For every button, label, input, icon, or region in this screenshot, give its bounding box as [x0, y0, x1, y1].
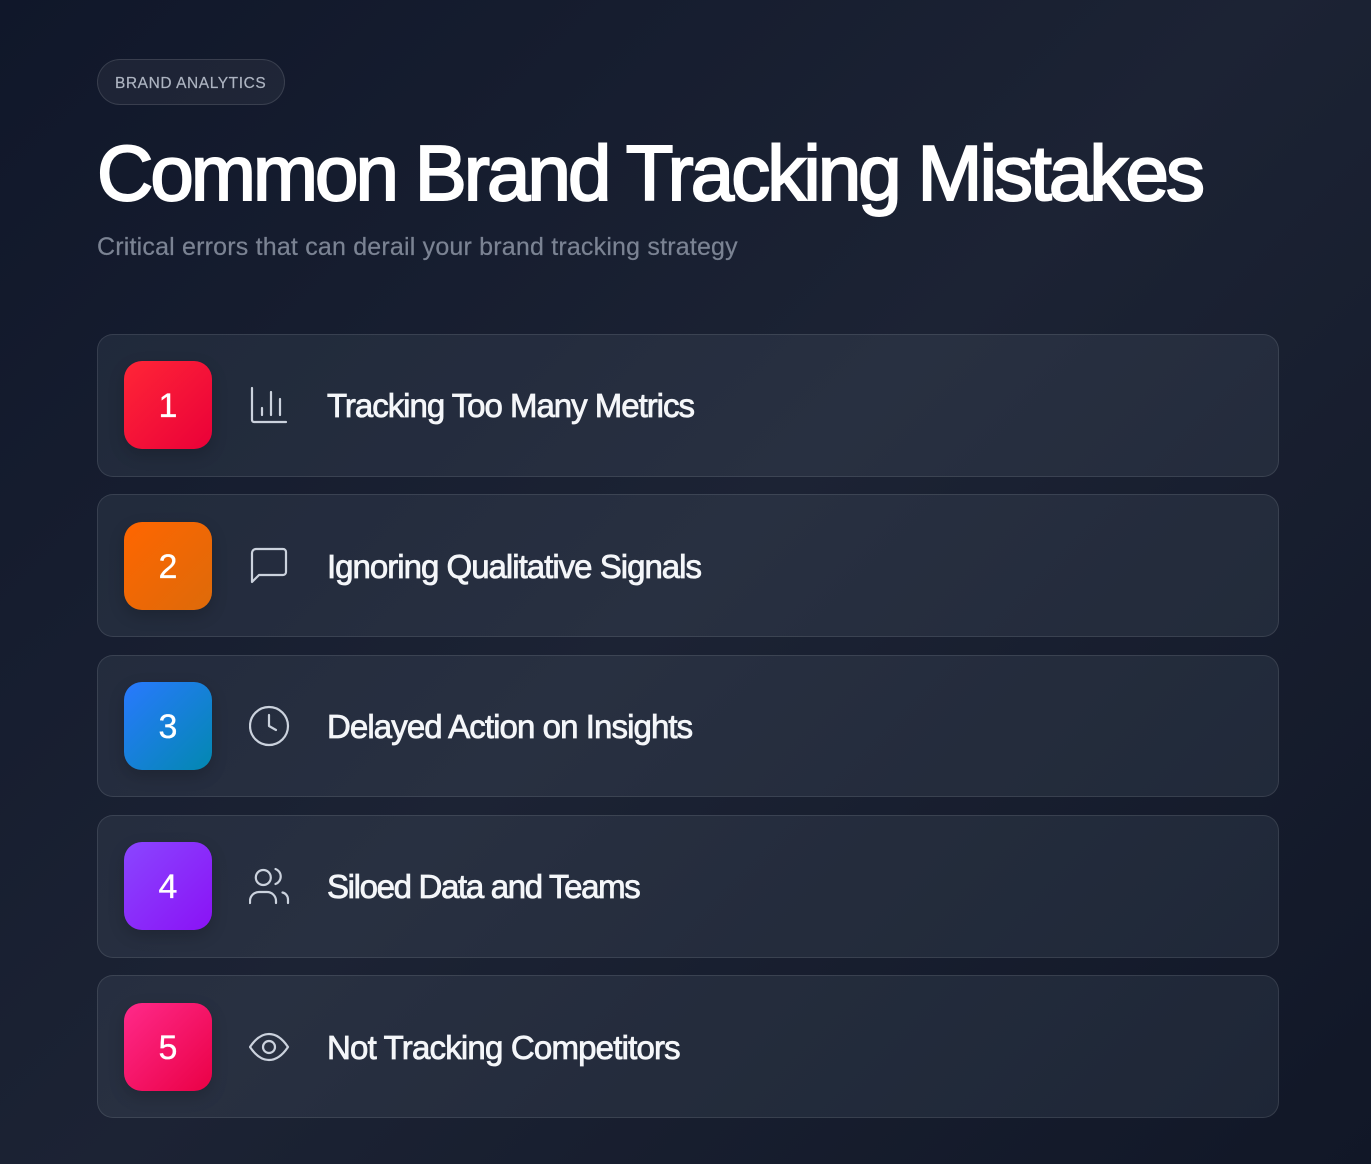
number badge 2	[124, 522, 212, 610]
panel: mistake 4	[97, 815, 1279, 958]
number badge 1: 1	[159, 387, 177, 425]
label 2: Ignoring Qualitative Signals	[327, 548, 701, 585]
label 3: Delayed Action on Insights	[327, 708, 692, 745]
number badge 2: 2	[159, 548, 177, 586]
panel: mistake 1	[97, 334, 1279, 477]
number badge 3	[124, 682, 212, 770]
subtitle: Critical errors that can derail your brand tracking strategy	[97, 233, 738, 261]
label 4: Siloed Data and Teams	[327, 868, 639, 905]
icon: clock	[249, 706, 290, 746]
icon: bar chart	[250, 386, 288, 424]
label 1: Tracking Too Many Metrics	[327, 387, 694, 424]
number badge 4	[124, 842, 212, 930]
number badge 5: 5	[159, 1029, 177, 1067]
icon: users	[249, 868, 290, 904]
label 5: Not Tracking Competitors	[327, 1029, 680, 1066]
number badge 5	[124, 1003, 212, 1091]
icon: speech bubble	[250, 548, 288, 584]
number badge 3: 3	[159, 708, 177, 746]
icon: eye	[249, 1032, 290, 1062]
number badge 1	[124, 361, 212, 449]
panel: mistake 3	[97, 655, 1279, 797]
panel: mistake 5	[97, 975, 1279, 1118]
number badge 4: 4	[159, 868, 177, 906]
badge: BRAND ANALYTICS	[115, 74, 266, 92]
panel: mistake 2	[97, 494, 1279, 637]
title: Common Brand Tracking Mistakes	[97, 129, 1202, 217]
badge	[97, 59, 285, 105]
